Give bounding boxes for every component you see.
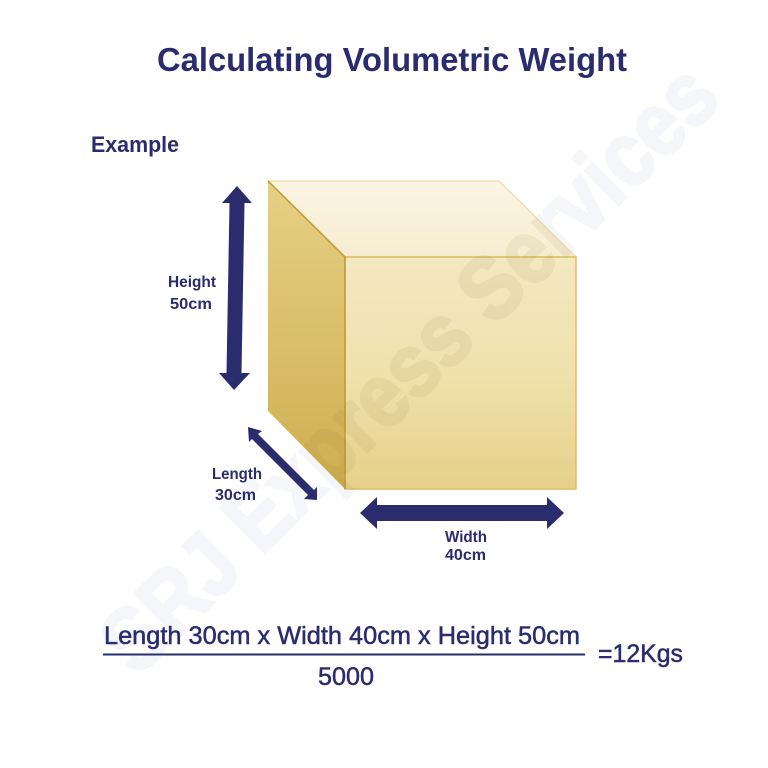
cube xyxy=(268,181,576,489)
denominator: 5000 xyxy=(318,663,374,691)
numerator: Length 30cm x Width 40cm x Height 50cm xyxy=(104,622,580,650)
length arrow xyxy=(248,427,317,500)
title: Calculating Volumetric Weight xyxy=(157,41,627,78)
height label xyxy=(168,274,217,313)
width label: Width xyxy=(445,529,487,546)
cube top face xyxy=(268,181,576,257)
height label: Height xyxy=(168,274,217,291)
length label: Length xyxy=(212,466,262,483)
cube edge xyxy=(268,181,345,489)
width arrow xyxy=(360,497,564,529)
height arrow xyxy=(219,186,252,390)
result: =12Kgs xyxy=(598,640,683,668)
length label xyxy=(212,466,262,504)
width label: 40cm xyxy=(445,547,486,564)
cube left face xyxy=(268,181,345,489)
formula xyxy=(103,622,683,691)
fraction line xyxy=(103,654,585,656)
height label: 50cm xyxy=(170,296,212,313)
length label: 30cm xyxy=(215,487,256,504)
width label xyxy=(445,529,487,564)
example heading: Example xyxy=(91,132,179,157)
cube front face xyxy=(345,257,576,489)
